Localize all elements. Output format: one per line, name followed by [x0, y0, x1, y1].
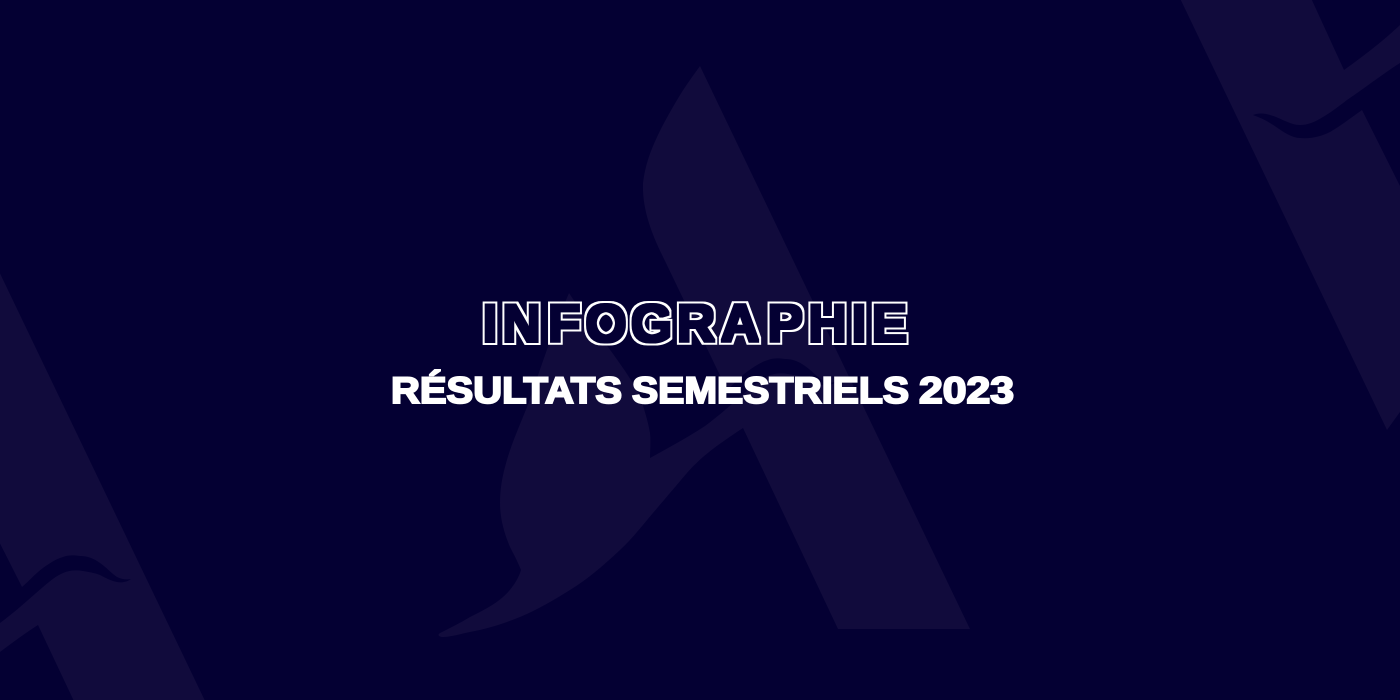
- watermark logo: centre: [439, 66, 970, 637]
- subtitle: RÉSULTATS: [391, 369, 622, 411]
- heading: outlined title: INFOGRAPHIE: [483, 295, 907, 354]
- watermark logo: top right: [1181, 0, 1400, 430]
- watermark logo: bottom left: [0, 273, 205, 700]
- subtitle: SEMESTRIELS: [632, 369, 909, 411]
- subtitle: 2023: [919, 369, 1014, 411]
